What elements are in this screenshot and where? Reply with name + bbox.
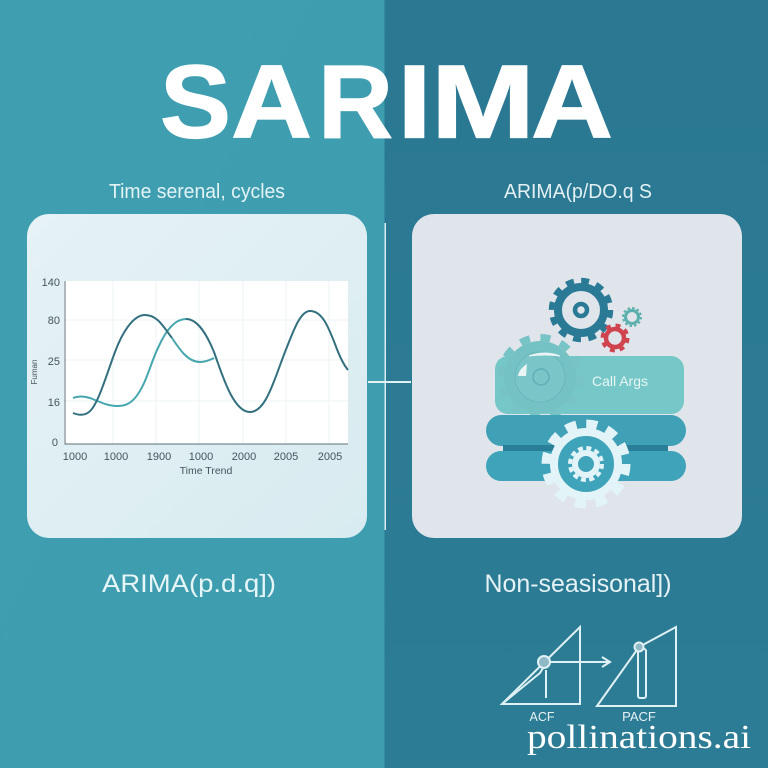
title: R: [318, 44, 393, 160]
series: light teal curve: [73, 319, 186, 406]
title: A: [531, 44, 613, 160]
layer: light teal bar: [495, 356, 684, 414]
y axis title: Fuman: [30, 360, 39, 384]
grid lines: [64, 281, 348, 444]
y axis labels: 16: [48, 397, 60, 409]
title: [160, 44, 613, 160]
chart axes: [65, 281, 348, 444]
title: I: [397, 44, 432, 160]
right background panel: [384, 0, 768, 768]
x axis labels: [63, 451, 342, 463]
y axis labels: 0: [52, 437, 58, 449]
diagram: ACF triangle: [502, 627, 580, 704]
right subtitle: ARIMA(p/DO.q S: [504, 181, 652, 203]
title: S: [160, 44, 231, 160]
y axis labels: 80: [48, 315, 60, 327]
x axis labels: 2000: [232, 451, 256, 463]
x axis labels: 1000: [104, 451, 128, 463]
panel: time series chart: [27, 214, 367, 538]
x axis labels: 1900: [147, 451, 171, 463]
y axis labels: 140: [42, 277, 60, 289]
title: A: [231, 44, 312, 160]
layer: teal bar upper: [486, 415, 686, 446]
label: ACF: ACF: [530, 710, 555, 724]
x axis labels: 2005: [274, 451, 298, 463]
watermark: pollinations.ai: [527, 719, 751, 756]
series: dark curve long: [186, 311, 348, 412]
arrow: ACF to PACF: [550, 657, 610, 667]
title: M: [431, 44, 535, 160]
y axis labels: [42, 277, 60, 449]
x axis labels: 1000: [63, 451, 87, 463]
x axis labels: 2005: [318, 451, 342, 463]
left subtitle: Time serenal, cycles: [109, 181, 285, 203]
layer: teal bar lower: [486, 451, 686, 481]
icon: small teal gear: [623, 308, 641, 326]
series: dark curve short: [73, 315, 172, 415]
icon: dark blue gear: [552, 280, 610, 340]
diagram: PACF triangle: [597, 627, 676, 706]
connector between bars: [503, 445, 668, 451]
chart plot area: [64, 281, 348, 444]
layer label: Call Args: [592, 373, 648, 389]
x axis labels: 1000: [189, 451, 213, 463]
left caption: ARIMA(p.d.q]): [102, 570, 276, 598]
right caption: Non-seasisonal]): [484, 570, 672, 598]
panel: gears and stacked layers: [412, 214, 742, 538]
y axis labels: 25: [48, 356, 60, 368]
icon: translucent teal gear: [500, 338, 580, 416]
icon: small red gear: [602, 325, 628, 351]
x axis title: Time Trend: [180, 465, 233, 477]
icon: white gear: [546, 424, 626, 504]
left background panel: [0, 0, 384, 768]
center divider: [368, 223, 411, 530]
label: PACF: PACF: [622, 709, 656, 724]
series: teal tail: [172, 338, 214, 362]
